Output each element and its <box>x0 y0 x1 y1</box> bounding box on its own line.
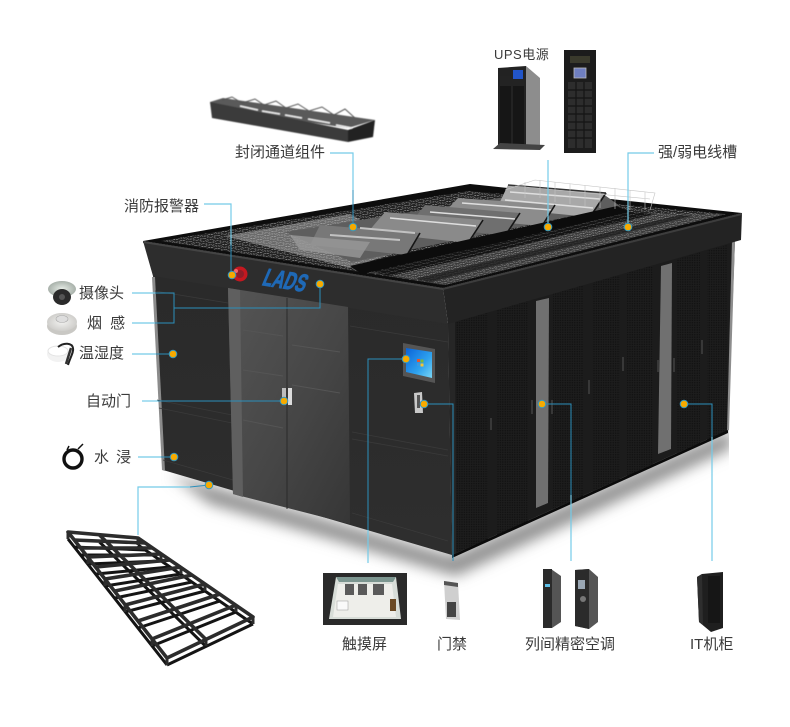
label: 消防报警器 <box>124 198 236 279</box>
roof with cable trays <box>143 184 742 288</box>
micro-module data centre enclosure <box>143 180 742 558</box>
label: 摄像头 and 烟感: 摄像头 <box>79 285 124 302</box>
label: 强/弱电线槽: 强/弱电线槽 <box>658 144 737 161</box>
icon: humidity sensor <box>47 344 73 365</box>
label: 门禁 <box>420 400 467 653</box>
label: UPS电源 <box>494 47 552 231</box>
top cap fascia <box>143 213 742 324</box>
icon: raised floor frame <box>68 532 253 665</box>
label: UPS电源: UPS电源 <box>494 47 549 62</box>
icon: rack UPS <box>493 66 545 150</box>
icon: access control reader <box>444 581 460 620</box>
label: 列间精密空调: 列间精密空调 <box>525 636 615 653</box>
label: 温湿度 <box>79 345 177 362</box>
icon: water leak sensor <box>64 444 83 468</box>
wire cage above roof <box>505 180 655 210</box>
icon: smoke sensor <box>47 313 77 335</box>
glass ceiling panels <box>285 185 620 262</box>
label: 触摸屏: 触摸屏 <box>342 636 387 653</box>
floor shadow <box>170 430 732 576</box>
label: 封闭通道组件 <box>235 144 357 231</box>
central black divider <box>350 206 630 274</box>
icon: in-row precision AC units <box>543 569 598 629</box>
door handle <box>282 388 292 405</box>
icon: tower UPS <box>564 50 596 153</box>
label: 温湿度: 温湿度 <box>79 345 124 362</box>
label: 自动门 <box>86 393 288 410</box>
right face with cabinets <box>448 240 735 558</box>
label: 列间精密空调 <box>525 400 615 653</box>
label: 门禁: 门禁 <box>437 636 467 653</box>
icon: containment assembly <box>210 97 375 142</box>
label: 封闭通道组件: 封闭通道组件 <box>235 144 325 161</box>
label: 触摸屏 <box>342 355 410 653</box>
callout: raised floor <box>138 481 213 535</box>
left face of enclosure <box>152 275 452 555</box>
label: 自动门: 自动门 <box>86 393 131 410</box>
label: 摄像头 and 烟感: 烟 感 <box>87 315 125 332</box>
alarm beacon <box>232 266 248 282</box>
access control reader on wall <box>414 392 423 413</box>
glass double door <box>228 288 350 524</box>
label: 强/弱电线槽 <box>624 144 737 231</box>
icon: dome camera <box>48 281 76 305</box>
icon: IT cabinet <box>697 572 723 632</box>
light strip doors <box>536 263 672 508</box>
label: IT机柜 <box>680 400 733 653</box>
LADS logo: LADS <box>259 264 312 297</box>
icon: touch-screen preview <box>323 573 407 625</box>
label: IT机柜: IT机柜 <box>690 636 733 653</box>
label: 消防报警器: 消防报警器 <box>124 198 199 215</box>
label: 水浸 <box>94 449 178 466</box>
right cable trays <box>365 212 726 285</box>
label: 水浸: 水 浸 <box>94 449 131 466</box>
label: 摄像头 and 烟感 <box>79 280 324 332</box>
touch screen <box>403 343 435 383</box>
